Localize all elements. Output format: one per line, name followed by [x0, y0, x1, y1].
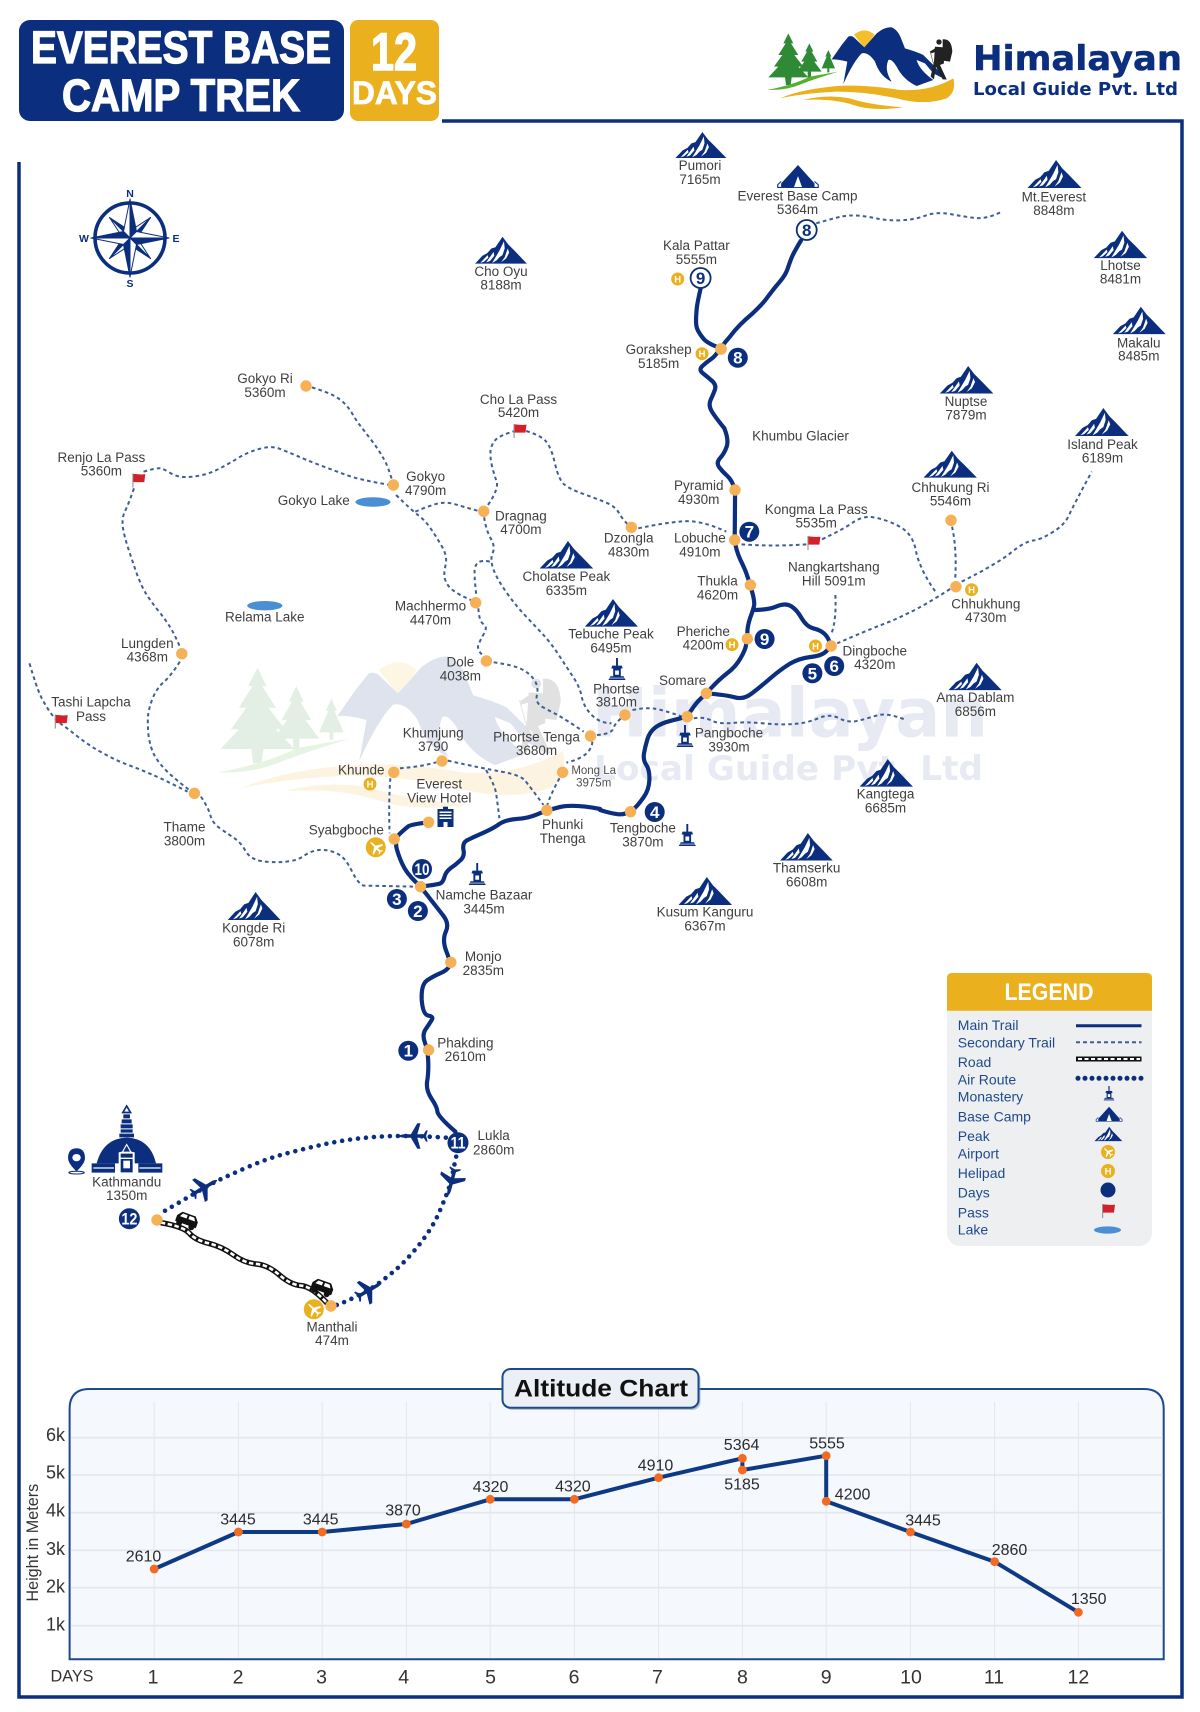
place: Thukla: Thukla — [697, 574, 738, 589]
place: Pangboche: 3930m — [708, 740, 750, 755]
peak: Island Peak — [1067, 408, 1138, 466]
x axis labels: 7 — [652, 1666, 663, 1688]
legend row: Monastery: Monastery — [958, 1088, 1023, 1104]
peak: Kusum Kanguru: 6367m — [684, 919, 726, 934]
peak: Cho Oyu: 8188m — [480, 278, 522, 292]
chart value labels: 3445 — [303, 1511, 339, 1528]
icon: plane Lukla to Kathmandu — [399, 1123, 428, 1149]
y axis labels: 6k — [46, 1425, 66, 1445]
peak: Kangtega: 6685m — [865, 800, 906, 815]
place: Everest View Hotel: Everest — [416, 776, 462, 791]
peak: Lhotse — [1094, 231, 1147, 286]
x axis labels: 4 — [398, 1666, 409, 1688]
place: Mong La: 3975m — [576, 778, 611, 790]
legend row: Peak: Peak — [958, 1128, 991, 1144]
legend row: Monastery — [958, 1086, 1114, 1104]
chart: altitude chart — [24, 1389, 1164, 1688]
peak: Makalu: Makalu — [1117, 335, 1161, 350]
place: Dingboche with days 5 and 6: 6 — [829, 657, 839, 676]
air routes — [161, 1136, 456, 1305]
place: Chhukhung: Chhukhung — [951, 596, 1020, 611]
place: Khumjung: Khumjung — [403, 725, 464, 740]
place: Phunki Thenga: Thenga — [540, 831, 586, 846]
compass rose: N — [126, 188, 134, 200]
place: Thukla: 4620m — [697, 587, 738, 602]
peak: Kongde Ri: 6078m — [233, 935, 274, 950]
lake: Gokyo Lake: Gokyo Lake — [278, 493, 350, 508]
place: Kathmandu with day 12: 1350m — [106, 1188, 147, 1203]
main trail — [396, 241, 830, 1132]
legend row: Peak — [958, 1127, 1122, 1144]
peak: Mt.Everest: 8848m — [1033, 203, 1075, 218]
chart value labels: 3445 — [905, 1512, 941, 1529]
place: Kala Pattar with day 9: H — [674, 274, 681, 286]
peak: Kongde Ri: Kongde Ri — [222, 921, 285, 936]
peak: Island Peak: Island Peak — [1067, 437, 1138, 452]
place: Gokyo Ri — [237, 371, 312, 400]
place: Monjo — [445, 949, 504, 978]
legend row: Airport: Airport — [958, 1145, 999, 1161]
legend row: Air Route: Air Route — [958, 1071, 1016, 1087]
pass: Tashi Lapcha Pass — [51, 695, 131, 728]
place: Thame: 3800m — [164, 834, 205, 849]
place: Dole: Dole — [447, 655, 474, 670]
place: Phortse Tenga — [493, 729, 596, 758]
place: Khumjung — [403, 725, 464, 767]
duration badge: 12 days — [350, 20, 439, 121]
lake: Gokyo Lake — [278, 493, 391, 508]
peak: Kangtega — [857, 759, 915, 815]
place: Tengboche with day 4 — [610, 802, 696, 850]
place: Dzongla — [604, 522, 654, 560]
icon: jeep near Manthali — [309, 1277, 335, 1299]
peak: Thamserku: 6608m — [786, 875, 827, 890]
peak: Kusum Kanguru — [657, 877, 753, 934]
compass rose — [79, 188, 180, 290]
peak: Mt.Everest — [1022, 160, 1086, 218]
place: Lukla with day 11: 11 — [450, 1134, 466, 1153]
peak: Cho Oyu — [474, 237, 528, 292]
place: Pangboche: Pangboche — [695, 725, 763, 740]
monastery: Phortse: Phortse — [593, 681, 640, 696]
place: Khumjung: 3790 — [418, 739, 448, 754]
place: Gokyo: 4790m — [405, 483, 446, 498]
peak: Makalu — [1113, 307, 1166, 364]
legend row: Pass — [958, 1204, 1115, 1220]
monastery: Phortse — [593, 658, 640, 721]
duration badge: 12 days: 12 — [371, 23, 417, 82]
peak: Island Peak: 6189m — [1082, 451, 1123, 466]
place: Tengboche with day 4: Tengboche — [610, 821, 676, 836]
peak: Nuptse: Nuptse — [945, 394, 987, 409]
pass: Tashi Lapcha Pass: Pass — [76, 709, 106, 724]
pass: Kongma La Pass: 5535m — [796, 516, 837, 531]
place: Thame: Thame — [163, 820, 206, 835]
y axis labels — [46, 1425, 66, 1635]
peak: Kangtega: Kangtega — [857, 786, 914, 801]
place: Kathmandu with day 12: 12 — [121, 1210, 137, 1229]
y axis labels: 5k — [46, 1463, 66, 1483]
legend row: Pass: Pass — [958, 1204, 989, 1220]
place: Pheriche with day 9: Pheriche — [677, 624, 730, 639]
place: Phakding with day 1: 1 — [404, 1042, 413, 1061]
place: Dingboche with days 5 and 6 — [802, 640, 907, 683]
lake: Relama Lake — [225, 601, 305, 625]
pass: Cho La Pass: Cho La Pass — [480, 392, 557, 407]
chart value labels: 5555 — [809, 1435, 845, 1452]
x axis labels: 12 — [1068, 1666, 1089, 1688]
watermark text — [592, 675, 988, 789]
peak: Lhotse: 8481m — [1100, 272, 1141, 286]
pass: Renjo La Pass: Renjo La Pass — [57, 450, 145, 465]
place: Dole — [440, 655, 492, 684]
place: Phunki Thenga: Phunki — [542, 817, 583, 832]
place: Phakding with day 1: 2610m — [445, 1049, 486, 1064]
icon: Kathmandu stupa — [92, 1104, 162, 1173]
place: Chhukhung: 4730m — [965, 610, 1006, 625]
title banner: Everest Base Camp Trek: CAMP TREK — [62, 70, 300, 121]
y axis labels: 1k — [46, 1615, 66, 1635]
legend row: Road: Road — [958, 1054, 991, 1070]
icon: plane below Lukla — [436, 1164, 468, 1199]
place: Kala Pattar with day 9: Kala Pattar — [663, 238, 730, 253]
peak: Chhukung Ri: Chhukung Ri — [911, 480, 990, 495]
peak: Cholatse Peak — [522, 541, 611, 598]
legend row: Days — [958, 1182, 1116, 1201]
place: Dzongla: Dzongla — [604, 531, 653, 546]
legend row: Days: Days — [958, 1185, 990, 1201]
base camp: Everest Base Camp: Everest Base Camp — [737, 189, 858, 204]
peak: Pumori: Pumori — [679, 158, 721, 173]
place: Namche Bazaar with days 2, 3, 10: Namche Bazaar — [436, 887, 532, 902]
peak: Ama Dablam: 6856m — [955, 704, 996, 719]
place: Monjo: 2835m — [463, 963, 504, 978]
place: Namche Bazaar with days 2, 3, 10: 2 — [413, 902, 423, 921]
lake: Relama Lake: Relama Lake — [225, 610, 305, 625]
place: Machhermo: Machhermo — [395, 599, 466, 614]
day marker: 8 at Everest Base Camp: 8 — [802, 221, 811, 240]
logo: Himalayan Local Guide: Himalayan — [973, 39, 1182, 79]
x axis labels: 8 — [737, 1666, 748, 1688]
place: Namche Bazaar with days 2, 3, 10 — [387, 859, 533, 921]
panel: legend: LEGEND — [1004, 979, 1094, 1006]
chart value labels: 4910 — [638, 1458, 673, 1475]
place: Lukla with day 11: Lukla — [478, 1128, 510, 1143]
place: Pheriche with day 9: 4200m — [683, 637, 724, 652]
place: Everest View Hotel — [407, 776, 471, 828]
peak: Cholatse Peak: Cholatse Peak — [522, 569, 610, 584]
secondary trails — [29, 212, 1092, 887]
place: Somare: Somare — [659, 673, 706, 688]
place: Lobuche with day 7: 7 — [745, 523, 754, 542]
peak: Thamserku — [773, 833, 840, 890]
pass: Tashi Lapcha Pass: Tashi Lapcha — [51, 695, 131, 710]
place: Dingboche with days 5 and 6: 5 — [808, 664, 817, 683]
watermark logo — [219, 656, 564, 808]
place: Somare — [659, 673, 712, 699]
legend row: Main Trail: Main Trail — [958, 1017, 1018, 1033]
x axis labels: 5 — [485, 1666, 496, 1688]
peak: Thamserku: Thamserku — [773, 861, 840, 876]
chart value labels — [126, 1435, 1107, 1608]
place: Monjo: Monjo — [465, 949, 502, 964]
legend row: Airport — [958, 1145, 1115, 1161]
place: Pangboche — [676, 711, 763, 755]
peak: Ama Dablam: Ama Dablam — [936, 690, 1014, 705]
y axis labels: 2k — [46, 1577, 66, 1597]
chart line: altitude by day — [154, 1456, 1078, 1612]
chart data points — [150, 1451, 1083, 1617]
icon: plane near Kathmandu — [186, 1169, 224, 1206]
chart value labels: 3445 — [220, 1511, 256, 1528]
place: Kathmandu with day 12: Kathmandu — [92, 1175, 161, 1190]
place: Gorakshep — [626, 342, 748, 371]
place: Chhukhung: H — [968, 585, 975, 596]
place: Pheriche with day 9 — [677, 624, 775, 652]
place: Gokyo: Gokyo — [406, 469, 445, 484]
place: Kala Pattar with day 9 — [663, 238, 730, 288]
place: Machhermo — [395, 597, 481, 627]
place: Gorakshep: 5185m — [638, 356, 679, 371]
place: Lungden: 4368m — [127, 650, 168, 665]
place: Syabgboche with airport: Syabgboche — [309, 822, 384, 837]
place: Gokyo Ri: Gokyo Ri — [237, 371, 293, 386]
compass rose: W — [79, 233, 89, 245]
y axis labels: 3k — [46, 1539, 66, 1559]
peak: Cholatse Peak: 6335m — [546, 583, 587, 598]
place: Phortse Tenga: 3680m — [516, 743, 557, 758]
place: Mong La: Mong La — [571, 765, 616, 777]
chart value labels: 4200 — [835, 1486, 870, 1503]
x axis labels: 2 — [233, 1666, 243, 1688]
place: Lobuche with day 7: 4910m — [679, 545, 721, 560]
label: Nangkartshang Hill: Hill 5091m — [802, 574, 866, 589]
chart value labels: 2860 — [992, 1542, 1027, 1559]
place: Lungden: Lungden — [121, 636, 174, 651]
place: Chhukhung — [950, 581, 1020, 625]
pass: Cho La Pass — [480, 392, 557, 438]
place: Gorakshep: H — [699, 349, 706, 360]
place: Pyramid — [674, 478, 741, 507]
road: Kathmandu to Manthali — [161, 1223, 327, 1303]
legend row: Helipad — [958, 1164, 1115, 1181]
watermark text: Himalayan — [592, 675, 988, 754]
x axis labels: 6 — [569, 1666, 579, 1688]
chart value labels: 5185 — [724, 1476, 760, 1493]
x axis labels: 1 — [148, 1666, 158, 1688]
place: Namche Bazaar with days 2, 3, 10: 10 — [414, 860, 430, 879]
place: Gokyo — [388, 469, 446, 498]
peak: Kusum Kanguru: Kusum Kanguru — [657, 905, 753, 920]
label: Khumbu Glacier: Khumbu Glacier — [752, 429, 849, 444]
place: Phortse Tenga: Phortse Tenga — [493, 729, 580, 744]
duration badge: 12 days: DAYS — [352, 75, 437, 111]
peak: Nuptse — [940, 366, 993, 422]
chart value labels: 4320 — [555, 1479, 591, 1496]
place: Phakding with day 1: Phakding — [437, 1035, 494, 1050]
peak: Lhotse: Lhotse — [1100, 258, 1141, 273]
place: Khunde: H — [367, 780, 374, 790]
heading: Altitude Chart — [502, 1369, 700, 1410]
heading: Altitude Chart: Altitude Chart — [514, 1376, 688, 1403]
x axis labels: 3 — [316, 1666, 327, 1688]
y axis title: Height in Meters — [24, 1484, 42, 1602]
place: Lobuche with day 7 — [674, 522, 759, 560]
place: Namche Bazaar with days 2, 3, 10: 3445m — [463, 901, 505, 916]
peak: Kongde Ri — [222, 892, 285, 950]
place: Khunde — [338, 762, 399, 790]
peak: Makalu: 8485m — [1118, 349, 1159, 364]
x axis labels — [51, 1666, 1089, 1688]
pass: Renjo La Pass — [57, 450, 146, 488]
panel: legend — [947, 973, 1152, 1246]
place: Dingboche with days 5 and 6: Dingboche — [843, 643, 907, 658]
legend row: Helipad: H — [1105, 1166, 1112, 1178]
x axis labels: 10 — [900, 1666, 922, 1688]
base camp: Everest Base Camp — [737, 165, 858, 217]
place: Lungden — [121, 636, 188, 665]
peak: Pumori — [675, 132, 726, 187]
place: Lobuche with day 7: Lobuche — [674, 531, 726, 546]
peak: Nuptse: 7879m — [945, 408, 987, 422]
place: Kathmandu with day 12 — [92, 1175, 163, 1229]
place: Pheriche with day 9: H — [729, 640, 736, 651]
base camp: Everest Base Camp: 5364m — [777, 202, 818, 217]
legend row: Secondary Trail: Secondary Trail — [958, 1034, 1055, 1050]
place: Manthali with airport: 474m — [315, 1333, 349, 1348]
place: Manthali with airport: Manthali — [306, 1320, 358, 1335]
peak: Chhukung Ri: 5546m — [930, 494, 971, 509]
title banner: Everest Base Camp Trek — [19, 20, 344, 121]
place: Kala Pattar with day 9: 5555m — [676, 252, 717, 267]
peak: Chhukung Ri — [911, 451, 990, 526]
legend row: Lake — [958, 1222, 1121, 1238]
chart value labels: 3870 — [385, 1503, 421, 1520]
place: Gokyo Ri: 5360m — [244, 385, 286, 400]
peak: Tebuche Peak: 6495m — [590, 640, 632, 655]
chart value labels: 1350 — [1071, 1591, 1107, 1608]
place: Pyramid: 4930m — [678, 492, 719, 507]
place: Pheriche with day 9: 9 — [760, 630, 769, 649]
x axis labels: 9 — [821, 1666, 832, 1688]
day marker: 8 at Everest Base Camp — [797, 220, 817, 240]
place: Dragnag: Dragnag — [495, 509, 547, 524]
pass: Renjo La Pass: 5360m — [81, 464, 122, 479]
x axis labels: 11 — [984, 1666, 1004, 1688]
chart value labels: 4320 — [473, 1479, 508, 1496]
place: Everest View Hotel: View Hotel — [407, 790, 471, 805]
label: Nangkartshang Hill: Nangkartshang — [788, 560, 880, 575]
icon: jeep near Kathmandu — [174, 1210, 200, 1232]
watermark text: Local Guide Pvt. Ltd — [594, 749, 983, 789]
place: Tengboche with day 4: 3870m — [622, 835, 664, 850]
legend row: Base Camp — [958, 1107, 1122, 1124]
place: Thukla — [697, 574, 756, 602]
logo: Himalayan Local Guide: Local Guide Pvt. Ltd — [973, 79, 1178, 100]
compass rose: E — [172, 233, 180, 245]
peak: Cho Oyu: Cho Oyu — [474, 264, 528, 279]
peak: Tebuche Peak — [568, 599, 654, 655]
legend row: Helipad: Helipad — [958, 1165, 1005, 1181]
chart value labels: 2610 — [126, 1549, 161, 1566]
x axis labels: DAYS — [51, 1668, 94, 1686]
place: Mong La — [557, 765, 617, 790]
y axis labels: 4k — [46, 1501, 66, 1521]
peak: Mt.Everest: Mt.Everest — [1022, 190, 1086, 205]
place: Dole: 4038m — [440, 669, 481, 684]
place: Dingboche with days 5 and 6: H — [812, 642, 819, 652]
place: Dragnag: 4700m — [500, 522, 542, 537]
place: Dingboche with days 5 and 6: 4320m — [854, 657, 895, 672]
place: Lukla with day 11 — [448, 1128, 514, 1157]
pass: Kongma La Pass: Kongma La Pass — [765, 502, 868, 517]
place: Pyramid: Pyramid — [674, 478, 723, 493]
legend row: Lake: Lake — [958, 1222, 988, 1238]
pass: Kongma La Pass — [765, 502, 868, 550]
title banner: Everest Base Camp Trek: EVEREST BASE — [31, 22, 331, 73]
icon: plane near Manthali — [350, 1272, 388, 1308]
peak: Tebuche Peak: Tebuche Peak — [568, 626, 654, 641]
place: Tengboche with day 4: 4 — [650, 803, 660, 822]
peak: Pumori: 7165m — [679, 172, 721, 187]
place: Lukla with day 11: 2860m — [473, 1142, 514, 1157]
place: Thame — [163, 788, 206, 849]
place: Dragnag — [478, 506, 547, 537]
place: Machhermo: 4470m — [410, 612, 451, 627]
place: Kala Pattar with day 9: 9 — [696, 269, 705, 288]
logo: Himalayan Local Guide — [767, 27, 1182, 109]
place: Dzongla: 4830m — [608, 545, 649, 560]
place: Syabgboche with airport — [309, 822, 400, 857]
legend row: Base Camp: Base Camp — [958, 1108, 1031, 1124]
place: Manthali with airport — [304, 1299, 358, 1348]
monastery: Phortse: 3810m — [596, 695, 637, 710]
place: Gorakshep: Gorakshep — [626, 342, 692, 357]
place: Namche Bazaar with days 2, 3, 10: 3 — [392, 890, 402, 909]
pass: Cho La Pass: 5420m — [498, 405, 539, 420]
icon: location pin — [68, 1148, 85, 1174]
compass rose: S — [126, 278, 134, 290]
place: Gorakshep: 8 — [733, 349, 743, 368]
chart value labels: 5364 — [724, 1437, 759, 1454]
place: Phunki Thenga — [540, 805, 586, 846]
place: Phakding with day 1 — [398, 1035, 494, 1064]
place: Khunde: Khunde — [338, 762, 385, 777]
peak: Ama Dablam — [936, 663, 1014, 719]
